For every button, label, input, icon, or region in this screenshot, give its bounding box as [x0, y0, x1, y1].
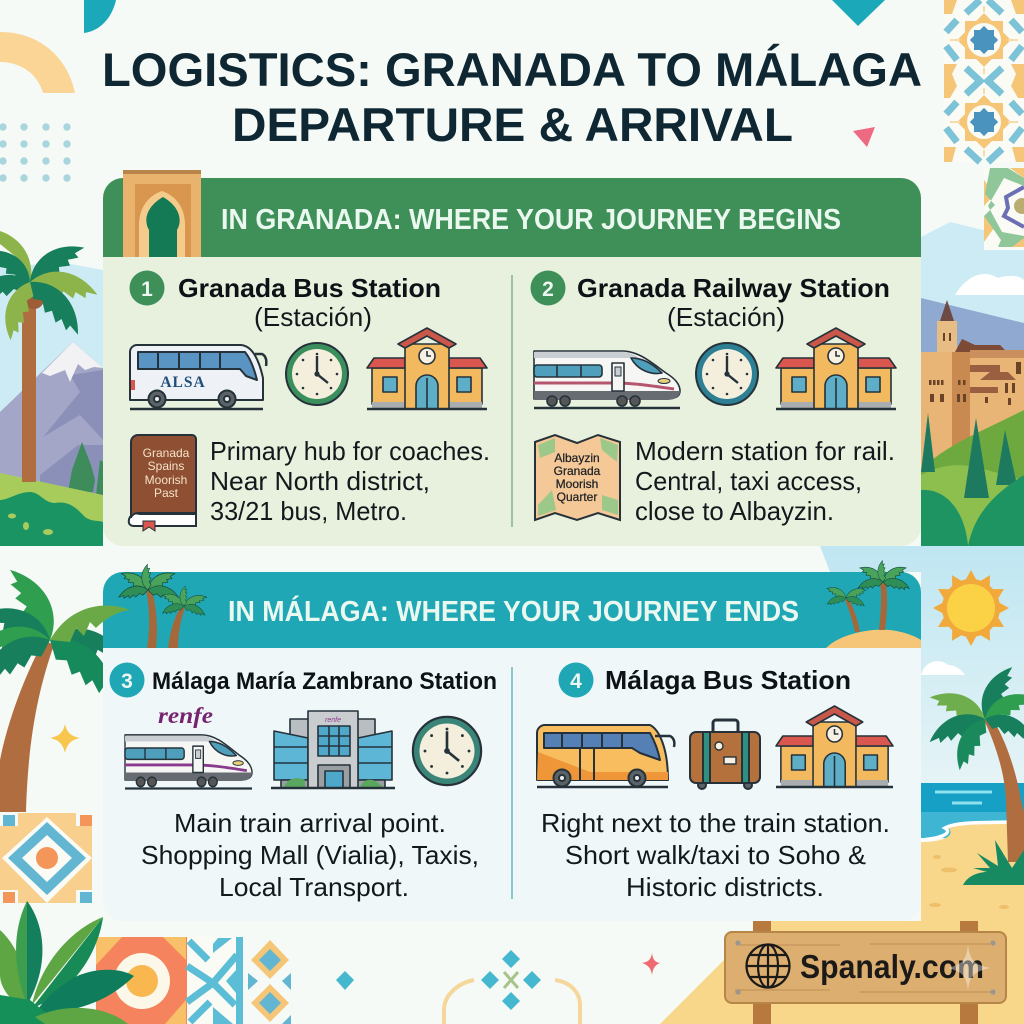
title: DEPARTURE & ARRIVAL: [232, 98, 793, 151]
decoration: bottom diamond tile: [248, 940, 291, 1024]
icon: Albayzin map: Albayzin: [554, 451, 600, 465]
icon: orange coach: [537, 725, 674, 787]
text 3: [141, 808, 479, 902]
heading: Granada: IN GRANADA: WHERE YOUR JOURNEY BEGINS: [221, 204, 841, 236]
panel header: Málaga: [103, 572, 921, 648]
text 1: 33/21 bus, Metro.: [210, 496, 407, 526]
text 4: Short walk/taxi to Soho &: [565, 840, 866, 870]
text 3: Main train arrival point.: [174, 808, 446, 838]
decoration: left diamond tile: [0, 813, 92, 903]
icon: ALSA coach: ALSA: [160, 374, 206, 391]
text 2: Central, taxi access,: [635, 466, 862, 496]
scene: Granada left landscape: [0, 231, 103, 546]
icon: history book: Moorish: [145, 473, 187, 487]
decoration: yellow sparkle: [50, 724, 80, 753]
item 3: Málaga María Zambrano Station: [110, 662, 497, 902]
item 1: Granada Bus Station: [129, 270, 490, 531]
decoration: bottom orange target tile: [96, 937, 187, 1024]
text 1: Near North district,: [210, 466, 430, 496]
scene: Málaga beach background: [660, 546, 1024, 1024]
text 2: close to Albayzin.: [635, 496, 834, 526]
icon: station: [776, 706, 893, 787]
icon: station: [776, 328, 896, 409]
decoration: top teal triangle: [832, 0, 885, 26]
decoration: bottom centre motif and arch: [444, 950, 580, 1024]
badge 4: [558, 662, 594, 698]
panel body: Granada: [103, 250, 921, 546]
decoration: pink sparkle: [642, 953, 660, 975]
heading 2: (Estación): [667, 302, 785, 332]
panel body: Málaga: [103, 640, 921, 921]
sign text: Spanaly.com: [800, 948, 984, 985]
heading: Málaga: IN MÁLAGA: WHERE YOUR JOURNEY ENDS: [228, 594, 799, 628]
heading 1: Granada Bus Station: [178, 273, 441, 303]
icon: clock, dark teal: [413, 717, 481, 785]
heading 4: Málaga Bus Station: [605, 665, 851, 695]
item 4: Málaga Bus Station: [537, 662, 893, 902]
icon: history book: [129, 435, 196, 531]
scene: Granada right landscape with Alhambra: [921, 222, 1024, 546]
icon: renfe train: [125, 703, 252, 788]
decoration: top-left teal half circle: [84, 0, 116, 33]
icon: Albayzin map: Granada: [554, 464, 601, 478]
title: LOGISTICS: GRANADA TO MÁLAGA: [102, 43, 922, 96]
icon: globe: [746, 944, 790, 988]
text 4: [541, 808, 890, 902]
scene: left Málaga palm, front leaf over panel: [50, 605, 130, 642]
heading 2: Granada Railway Station: [577, 273, 890, 303]
text 3: Shopping Mall (Vialia), Taxis,: [141, 840, 479, 870]
icon: header palms and sand right: [825, 560, 921, 648]
icon: header palms left: [117, 564, 208, 648]
icon: clock, blue: [696, 343, 758, 405]
wooden sign: Spanaly.com: [725, 921, 1006, 1024]
icon: ALSA coach: [130, 345, 266, 409]
text 1: Primary hub for coaches.: [210, 436, 490, 466]
decoration: teal diamond: [336, 971, 354, 990]
icon: Albayzin map: [535, 435, 620, 520]
text 4: Right next to the train station.: [541, 808, 890, 838]
icon: renfe train: renfe: [158, 703, 213, 728]
icon: history book: Granada: [143, 446, 190, 460]
heading 1: [178, 273, 441, 332]
icon: station building: [271, 711, 395, 788]
scene: right beach palm: [925, 662, 1024, 885]
text 4: Historic districts.: [626, 872, 824, 902]
badge 2: [530, 270, 566, 306]
text 1: [210, 436, 490, 526]
icon: suitcase: [690, 720, 760, 789]
icon: history book: Spains: [148, 459, 184, 473]
panel header: Granada: [103, 178, 921, 257]
icon: history book: Past: [154, 486, 179, 500]
decoration: bottom-left tropical plant: [0, 901, 134, 1024]
icon: Albayzin map: Quarter: [557, 490, 597, 504]
icon: Albayzin map: Moorish: [556, 477, 598, 491]
decoration: bottom blue tile: [187, 937, 243, 1024]
icon: high-speed train: [534, 351, 680, 408]
heading 3: Málaga María Zambrano Station: [152, 668, 497, 695]
item 2: Granada Railway Station: [530, 270, 896, 526]
scene: left Málaga palm, rear leaves: [0, 563, 124, 812]
icon: sun: [933, 570, 1009, 646]
heading 2: [577, 273, 890, 332]
icon: clock, green: [286, 343, 348, 405]
icon: station building: renfe: [325, 717, 341, 724]
badge 1: [130, 270, 164, 306]
badge 2: 2: [542, 278, 554, 301]
badge 3: [110, 662, 144, 698]
badge 4: 4: [570, 670, 582, 693]
panel: Granada: [103, 170, 921, 546]
text 2: Modern station for rail.: [635, 436, 895, 466]
panel: Málaga: [103, 560, 921, 921]
decoration: top-right tile: [944, 0, 1024, 162]
decoration: top-left orange arc: [0, 32, 75, 93]
decoration: dot grid: [0, 123, 71, 182]
badge 1: 1: [141, 278, 153, 301]
heading 1: (Estación): [254, 302, 372, 332]
icon: Moorish arch: [123, 170, 201, 257]
text 3: Local Transport.: [219, 872, 409, 902]
decoration: small mosaic tile: [984, 168, 1024, 250]
text 2: [635, 436, 895, 526]
badge 3: 3: [121, 670, 133, 693]
title: [102, 43, 922, 151]
decoration: pink triangle: [853, 127, 875, 147]
icon: station: [367, 328, 487, 409]
